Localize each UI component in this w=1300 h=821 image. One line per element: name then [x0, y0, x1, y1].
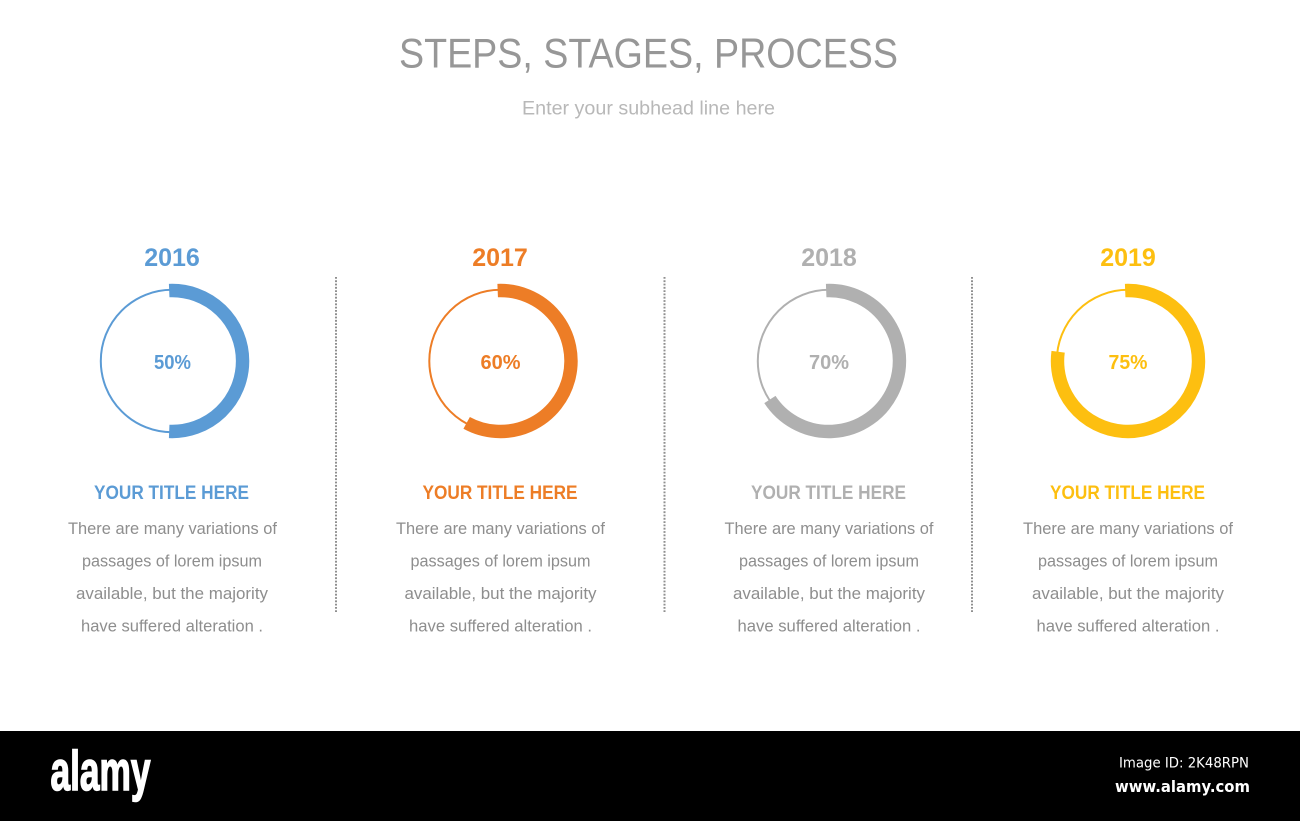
text block: 2018 description: have suffered alteration .: [738, 618, 920, 636]
text block: 2018 description: passages of lorem ipsum: [739, 552, 919, 570]
text block: 2019 description: available, but the majority: [1032, 585, 1225, 603]
logo: alamy: alamy: [50, 739, 150, 802]
text block: 2016 description: available, but the majority: [76, 585, 269, 603]
text block: 2017 description: There are many variations of: [396, 520, 605, 538]
donut: 60%: [429, 290, 572, 432]
heading: 2017 title: YOUR TITLE HERE: [422, 483, 578, 504]
text block: 2019 description: have suffered alteration .: [1036, 618, 1220, 636]
year: 2019: 2019: [1100, 244, 1156, 272]
text block: 2018 description: [724, 520, 934, 636]
text block: 2018 description: available, but the majority: [733, 585, 926, 603]
text block: 2017 description: [396, 520, 605, 636]
text block: 2016 description: passages of lorem ipsum: [82, 552, 262, 570]
text block: 2018 description: There are many variations of: [724, 520, 934, 538]
website: www.alamy.com: [1115, 777, 1250, 796]
panel: 2017: [396, 244, 605, 636]
text block: 2016 description: [68, 520, 277, 636]
donut: 50%: [101, 290, 243, 432]
image id: Image ID: 2K48RPN: [1119, 756, 1249, 772]
text block: 2019 description: passages of lorem ipsum: [1038, 552, 1218, 570]
title: STEPS, STAGES, PROCESS: [399, 30, 898, 76]
watermark band: [0, 731, 1300, 821]
percentage: 70%: 70%: [809, 352, 849, 374]
text block: 2016 description: There are many variations of: [68, 520, 277, 538]
panel: 2019: [1023, 244, 1233, 636]
text block: 2019 description: [1023, 520, 1233, 636]
text block: 2017 description: passages of lorem ipsum: [410, 552, 590, 570]
text block: 2017 description: available, but the majority: [404, 585, 597, 603]
donut: 75%: [1057, 290, 1199, 432]
panel: 2016: [68, 244, 277, 636]
year: 2018: 2018: [801, 244, 857, 272]
donut: 70%: [758, 290, 900, 432]
heading: 2016 title: YOUR TITLE HERE: [94, 483, 249, 504]
year: 2016: 2016: [144, 244, 200, 272]
year: 2017: 2017: [472, 244, 528, 272]
subhead: Enter your subhead line here: [522, 98, 775, 120]
heading: 2018 title: YOUR TITLE HERE: [751, 483, 906, 504]
text block: 2017 description: have suffered alteration .: [409, 618, 592, 636]
percentage: 60%: 60%: [480, 352, 521, 374]
percentage: 50%: 50%: [154, 352, 191, 374]
panel: 2018: [724, 244, 934, 636]
text block: 2016 description: have suffered alteration .: [81, 618, 263, 636]
heading: 2019 title: YOUR TITLE HERE: [1050, 483, 1205, 504]
text block: 2019 description: There are many variations of: [1023, 520, 1233, 538]
percentage: 75%: 75%: [1108, 352, 1148, 374]
